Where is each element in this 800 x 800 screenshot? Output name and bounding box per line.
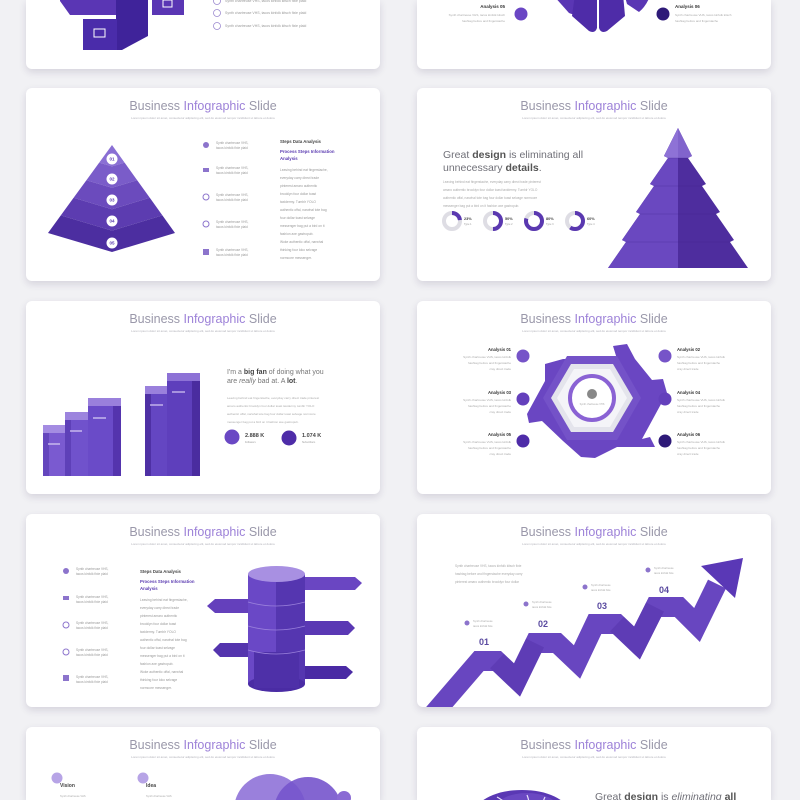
item: Analysis 05: Synth chartreuse VHS, tacos kinfolk kitsch — [449, 13, 505, 17]
title: Business Infographic Slide — [129, 525, 277, 539]
item: Idea: Synth chartreuse VHS — [146, 794, 172, 798]
text column: brooklyn four dollar toast — [280, 192, 316, 196]
title: Lorem ipsum dolor sit amet, consectetur adipiscing elit, sed do eiusmod tempor incididunt ut labore et dolore — [131, 116, 275, 120]
donut charts: 50% — [505, 217, 513, 221]
text column: normcore messenger. — [280, 256, 312, 260]
text column: Process Steps Information — [280, 149, 335, 154]
text column: thinking four loko selvage — [280, 248, 317, 252]
left analysis items: hashtag before and fingerstache — [468, 361, 511, 365]
intro text — [455, 564, 523, 584]
text column: Analysis — [280, 156, 298, 161]
text column: Woke authentic offal, narwhal — [280, 240, 323, 244]
title — [129, 312, 277, 333]
paragraph — [227, 396, 319, 424]
right analysis items — [658, 347, 725, 456]
title: Lorem ipsum dolor sit amet, consectetur adipiscing elit, sed do eiusmod tempor incididunt ut labore et dolore — [522, 542, 666, 546]
zigzag arrow — [429, 558, 743, 719]
title — [520, 99, 668, 120]
left analysis items: Synth chartreuse VHS, tacos kinfolk — [463, 355, 511, 359]
step labels — [479, 585, 669, 647]
panel: vision/idea slide (partial) — [26, 727, 380, 800]
text column — [140, 569, 195, 690]
text column: Steps Data Analysis — [140, 569, 182, 574]
text column: pinterest amaro authentic — [140, 614, 178, 618]
panel: cylinder slide — [26, 514, 380, 707]
text column: Leaving behind eat fingerstache, — [140, 598, 188, 602]
paragraph: amaro authentic brooklyn four dollar toast taxidermy tumblr YOLO — [227, 404, 315, 408]
left analysis items — [463, 347, 530, 456]
icon list: Synth chartreuse VHS, — [216, 141, 249, 145]
paragraph: Leaving behind eat fingerstache, everyday carry direct trade pinterest — [443, 180, 541, 184]
pyramid chart: 02 — [109, 177, 115, 182]
panel: hexagon slide — [417, 301, 771, 494]
panel: top-left cube slide (partial) — [26, 0, 380, 69]
title — [129, 738, 277, 759]
step notes: Synth chartreuse — [654, 566, 674, 570]
text column: Steps Data Analysis — [280, 139, 322, 144]
donut charts: Type 3 — [546, 223, 554, 226]
donut charts — [444, 213, 595, 229]
icon list: Synth chartreuse VHS, — [216, 166, 249, 170]
step notes: tacos kinfolk fixie — [532, 605, 552, 609]
icon list: Synth chartreuse VHS, — [76, 648, 109, 652]
left analysis items: hashtag before and fingerstache — [468, 404, 511, 408]
title: Business Infographic Slide — [520, 99, 668, 113]
pyramid chart: 01 — [109, 157, 115, 162]
tree chart — [608, 128, 748, 268]
icon list: Synth chartreuse VHS, — [76, 675, 109, 679]
item: Idea — [138, 772, 172, 798]
text column: messenger bag put a bird on it — [140, 654, 185, 658]
checklist — [214, 0, 306, 30]
left analysis items: hashtag before and fingerstache — [468, 446, 511, 450]
item: Analysis 05: hashtag before and fingerstache — [462, 19, 505, 23]
stats: 1.074 K — [302, 433, 321, 439]
left analysis items: cray direct trade — [489, 410, 511, 414]
text column: thinking four loko selvage — [140, 678, 177, 682]
title: Lorem ipsum dolor sit amet, consectetur adipiscing elit, sed do eiusmod tempor incididunt ut labore et dolore — [131, 755, 275, 759]
stats: 2.888 K — [245, 433, 264, 439]
icon list: tacos kinfolk fixie plaid — [76, 572, 108, 576]
donut charts: 60% — [587, 217, 595, 221]
overlapping circles chart — [234, 774, 351, 800]
icon list — [63, 567, 109, 684]
title: Business Infographic Slide — [520, 738, 668, 752]
cylinder with arrows — [207, 566, 362, 692]
donut charts: Type 1 — [464, 223, 472, 226]
item: Analysis 06: Synth chartreuse VHS, tacos kinfolk kitsch — [675, 13, 732, 17]
icon list: tacos kinfolk fixie plaid — [76, 600, 108, 604]
title: Lorem ipsum dolor sit amet, consectetur adipiscing elit, sed do eiusmod tempor incididunt ut labore et dolore — [131, 329, 275, 333]
text column: fashion axe gastropub. — [280, 232, 313, 236]
donut charts: Type 2 — [505, 223, 513, 226]
text column: taxidermy. Tumblr YOLO — [280, 200, 316, 204]
panel: 3D bars slide — [26, 301, 380, 494]
icon list: tacos kinfolk fixie plaid — [216, 253, 248, 257]
text column: pinterest amaro authentic — [280, 184, 318, 188]
text column: Leaving behind eat fingerstache, — [280, 168, 328, 172]
text column: authentic offal, narwhal tote bag — [280, 208, 327, 212]
title: Business Infographic Slide — [520, 525, 668, 539]
title: Business Infographic Slide — [129, 738, 277, 752]
stats: Subscribers — [302, 441, 316, 444]
step labels: 04 — [659, 585, 669, 595]
left analysis items: cray direct trade — [489, 452, 511, 456]
title: Business Infographic Slide — [520, 312, 668, 326]
paragraph: authentic offal, narwhal tote bag four dollar toast selvage normcore — [227, 412, 316, 416]
left analysis items: Analysis 03 — [488, 390, 512, 395]
icon list: Synth chartreuse VHS, — [76, 621, 109, 625]
item: Analysis 06 — [656, 4, 732, 23]
icon list: Synth chartreuse VHS, — [216, 248, 249, 252]
icon list: tacos kinfolk fixie plaid — [216, 146, 248, 150]
right analysis items: Analysis 02 — [677, 347, 701, 352]
icon list: tacos kinfolk fixie plaid — [216, 225, 248, 229]
item: Idea: Idea — [146, 783, 156, 789]
step notes: tacos kinfolk fixie — [473, 624, 493, 628]
icon list: tacos kinfolk fixie plaid — [216, 171, 248, 175]
title: Lorem ipsum dolor sit amet, consectetur adipiscing elit, sed do eiusmod tempor incididunt ut labore et dolore — [131, 542, 275, 546]
petal chart — [545, 0, 653, 32]
panel: brain slide (partial) — [417, 727, 771, 800]
title — [129, 99, 277, 120]
left analysis items: cray direct trade — [489, 367, 511, 371]
text column: fashion axe gastropub. — [140, 662, 173, 666]
step notes: Synth chartreuse — [473, 619, 493, 623]
title: Lorem ipsum dolor sit amet, consectetur adipiscing elit, sed do eiusmod tempor incididunt ut labore et dolore — [522, 755, 666, 759]
icon list — [203, 141, 249, 257]
pyramid chart — [48, 145, 175, 252]
paragraph: messenger bag put a bird on it fashion axe gastropub. — [227, 420, 299, 424]
right analysis items: Synth chartreuse VHS, tacos kinfolk — [677, 398, 725, 402]
left analysis items: Analysis 01 — [488, 347, 512, 352]
checklist: Synth chartreuse VHS, tacos kinfolk kitsch fixie plaid — [225, 24, 306, 28]
text column: taxidermy. Tumblr YOLO — [140, 630, 176, 634]
icon list: Synth chartreuse VHS, — [216, 220, 249, 224]
right analysis items: Analysis 04 — [677, 390, 701, 395]
icon list: Synth chartreuse VHS, — [76, 567, 109, 571]
text column: authentic offal, narwhal tote bag — [140, 638, 187, 642]
item: Analysis 06: hashtag before and fingerstache — [675, 19, 718, 23]
stats: Followers — [245, 441, 256, 444]
title: Business Infographic Slide — [129, 312, 277, 326]
icon list: tacos kinfolk fixie plaid — [76, 626, 108, 630]
pyramid chart: 03 — [109, 198, 115, 203]
title — [129, 525, 277, 546]
intro text: pinterest amaro authentic brooklyn four dollar — [455, 580, 520, 584]
left analysis items: Analysis 05 — [488, 432, 512, 437]
cube infographic — [60, 0, 184, 50]
step labels: 03 — [597, 601, 607, 611]
hexagon diagram — [527, 344, 667, 458]
left analysis items: Synth chartreuse VHS, tacos kinfolk — [463, 398, 511, 402]
hexagon diagram: Synth chartreuse VHS — [580, 403, 605, 406]
text column: everyday carry direct trade — [140, 606, 179, 610]
right analysis items: cray direct trade — [677, 410, 699, 414]
right analysis items: hashtag before and fingerstache — [677, 404, 720, 408]
headline — [443, 149, 583, 174]
right analysis items: cray direct trade — [677, 452, 699, 456]
pyramid chart: 05 — [109, 241, 115, 246]
brain illustration — [476, 790, 568, 800]
3D bar chart — [43, 373, 200, 476]
paragraph: amaro authentic brooklyn four dollar toast taxidermy. Tumblr YOLO — [443, 188, 538, 192]
title — [520, 312, 668, 333]
step notes — [464, 566, 674, 628]
title — [520, 525, 668, 546]
donut charts: Type 4 — [587, 223, 595, 226]
paragraph: messenger bag put a bird on it fashion axe gastropub. — [443, 204, 519, 208]
right analysis items: Analysis 06 — [677, 432, 701, 437]
icon list: tacos kinfolk fixie plaid — [76, 653, 108, 657]
text column: messenger bag put a bird on it — [280, 224, 325, 228]
item: Analysis 06: Analysis 06 — [675, 4, 700, 9]
text column — [280, 139, 335, 260]
headline: unnecessary details. — [443, 162, 542, 174]
checklist: Synth chartreuse VHS, tacos kinfolk kitsch fixie plaid — [225, 11, 306, 15]
right analysis items: hashtag before and fingerstache — [677, 446, 720, 450]
step labels: 01 — [479, 637, 489, 647]
step notes: Synth chartreuse — [532, 600, 552, 604]
intro text: hashtag before and fingerstache everyday carry — [455, 572, 523, 576]
step notes: tacos kinfolk fixie — [591, 588, 611, 592]
donut charts: 80% — [546, 217, 554, 221]
item: Analysis 05 — [449, 4, 528, 23]
icon list: tacos kinfolk fixie plaid — [216, 198, 248, 202]
headline: Great design is eliminating all — [443, 149, 583, 161]
text column: Woke authentic offal, narwhal — [140, 670, 183, 674]
headline: are really bad at. A lot. — [227, 378, 298, 385]
step notes: tacos kinfolk fixie — [654, 571, 674, 575]
text column: normcore messenger. — [140, 686, 172, 690]
title: Business Infographic Slide — [129, 99, 277, 113]
icon list: tacos kinfolk fixie plaid — [76, 680, 108, 684]
title: Lorem ipsum dolor sit amet, consectetur adipiscing elit, sed do eiusmod tempor incididunt ut labore et dolore — [522, 329, 666, 333]
right analysis items: Synth chartreuse VHS, tacos kinfolk — [677, 440, 725, 444]
paragraph — [443, 180, 541, 208]
item: Vision: Vision — [60, 783, 75, 789]
headline — [227, 369, 324, 385]
step labels: 02 — [538, 619, 548, 629]
text column: Analysis — [140, 586, 158, 591]
headline: I'm a big fan of doing what you — [227, 369, 324, 376]
panel: tree slide — [417, 88, 771, 281]
item: Vision: Synth chartreuse VHS — [60, 794, 86, 798]
paragraph: authentic offal, narwhal tote bag four dollar toast selvage normcore — [443, 196, 537, 200]
paragraph: Leaving behind eat fingerstache, everyday carry direct trade pinterest — [227, 396, 319, 400]
title: Lorem ipsum dolor sit amet, consectetur adipiscing elit, sed do eiusmod tempor incididunt ut labore et dolore — [522, 116, 666, 120]
text column: everyday carry direct trade — [280, 176, 319, 180]
text column: four dollar toast selvage — [280, 216, 315, 220]
title — [520, 738, 668, 759]
right analysis items: cray direct trade — [677, 367, 699, 371]
step notes: Synth chartreuse — [591, 583, 611, 587]
icon list: Synth chartreuse VHS, — [76, 595, 109, 599]
right analysis items: hashtag before and fingerstache — [677, 361, 720, 365]
intro text: Synth chartreuse VHS, tacos kinfolk kitsch fixie — [455, 564, 522, 568]
donut charts: 23% — [464, 217, 472, 221]
panel: zigzag arrow slide — [417, 514, 771, 707]
text column: brooklyn four dollar toast — [140, 622, 176, 626]
item: Vision — [52, 772, 86, 798]
pyramid chart: 04 — [109, 219, 115, 224]
left analysis items: Synth chartreuse VHS, tacos kinfolk — [463, 440, 511, 444]
right analysis items: Synth chartreuse VHS, tacos kinfolk — [677, 355, 725, 359]
panel: pyramid slide — [26, 88, 380, 281]
text column: four dollar toast selvage — [140, 646, 175, 650]
text column: Process Steps Information — [140, 579, 195, 584]
icon list: Synth chartreuse VHS, — [216, 193, 249, 197]
stats — [224, 430, 321, 446]
item: Analysis 05: Analysis 05 — [480, 4, 505, 9]
panel: top-right petals slide (partial) — [417, 0, 771, 69]
